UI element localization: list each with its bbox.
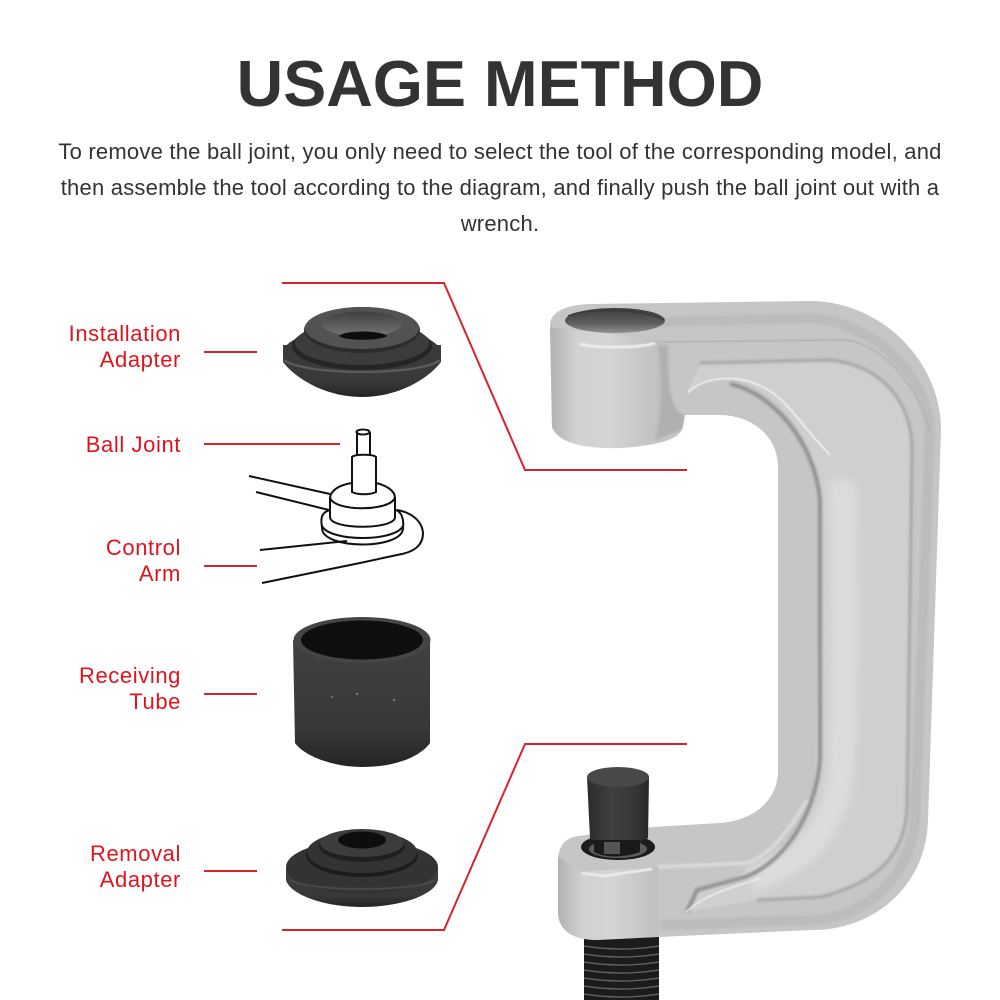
label: control arm: Control <box>106 535 181 560</box>
red leader lines <box>204 283 687 930</box>
upper hole <box>565 308 665 333</box>
label: installation adapter: Installation <box>69 321 181 346</box>
title: USAGE METHOD <box>237 48 763 120</box>
label: control arm <box>106 535 181 586</box>
pressing bolt <box>581 767 655 860</box>
label: receiving tube <box>79 663 181 714</box>
diagram illustration <box>204 282 941 1000</box>
description text: wrench. <box>461 211 539 236</box>
threaded screw <box>584 930 659 1000</box>
grooves <box>687 384 820 912</box>
label: installation adapter: Adapter <box>100 347 181 372</box>
description text <box>58 139 942 236</box>
receiving tube <box>293 617 430 767</box>
installation adapter <box>283 307 441 397</box>
description text: then assemble the tool according to the diagram, and finally push the ball joint out with a <box>61 175 939 200</box>
label: removal adapter: Removal <box>90 841 181 866</box>
upper boss cylinder <box>550 327 660 448</box>
C-clamp body <box>550 301 941 940</box>
removal adapter <box>286 829 438 907</box>
label: removal adapter <box>90 841 181 892</box>
ball joint and control arm line drawing <box>249 430 423 583</box>
label: installation adapter <box>69 321 181 372</box>
label: control arm: Arm <box>139 561 181 586</box>
description text: To remove the ball joint, you only need to select the tool of the corresponding model, and <box>58 139 942 164</box>
lower boss <box>558 857 658 940</box>
label: ball joint: Ball Joint <box>86 432 181 457</box>
outer band shading <box>660 318 930 925</box>
label: receiving tube: Tube <box>129 689 181 714</box>
label: receiving tube: Receiving <box>79 663 181 688</box>
central flat panel <box>687 360 911 912</box>
label: removal adapter: Adapter <box>100 867 181 892</box>
